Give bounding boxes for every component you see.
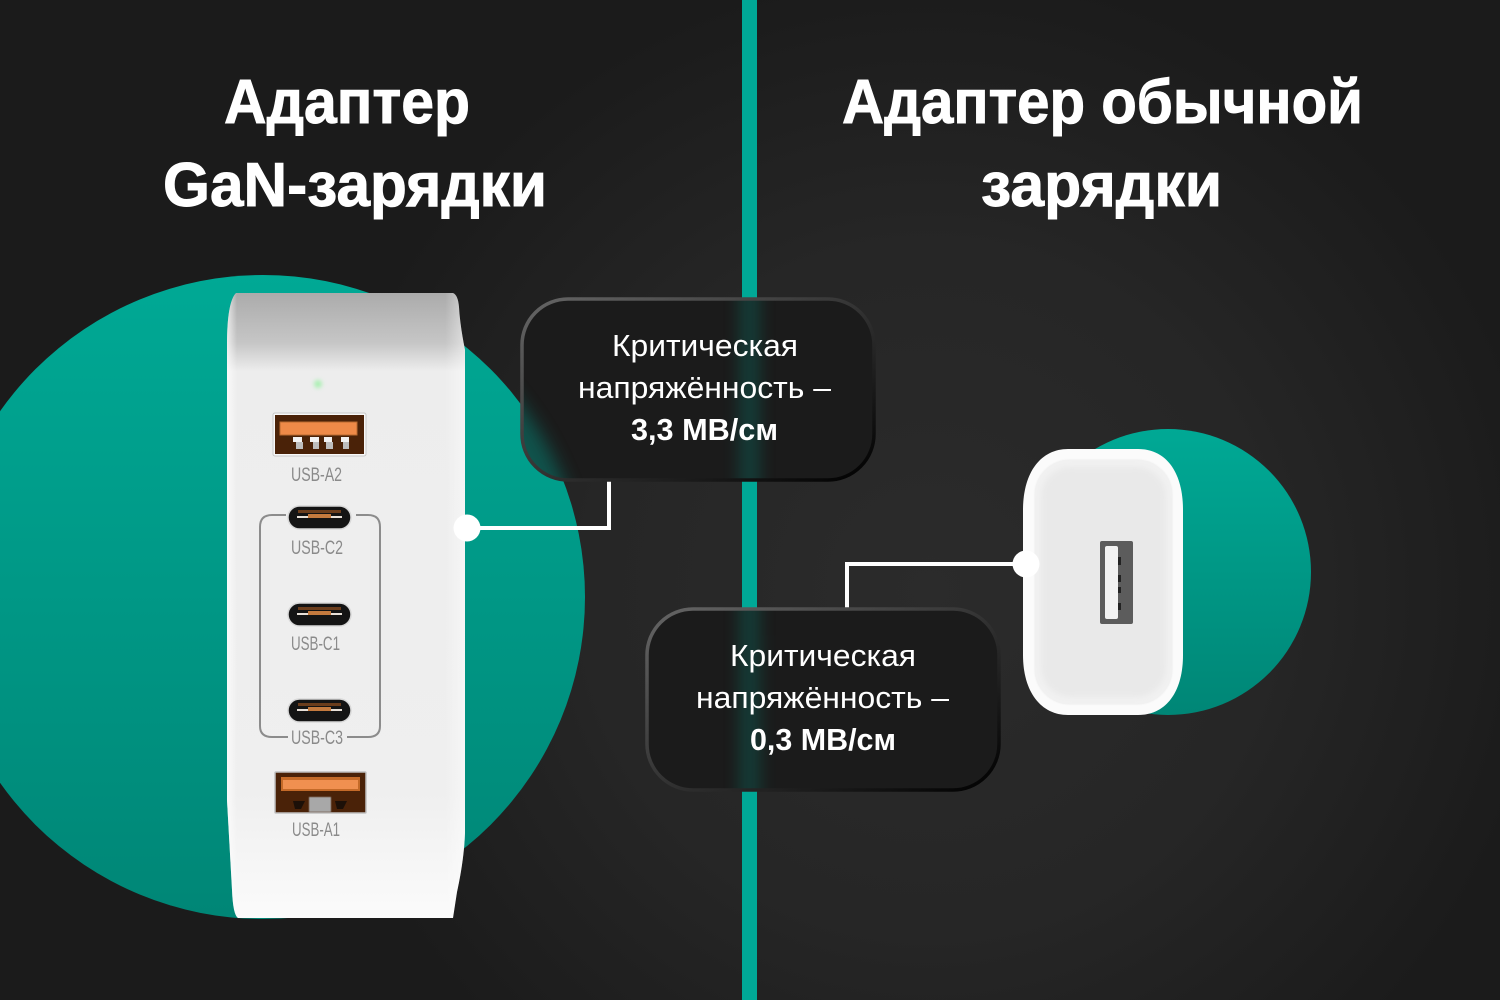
label: USB-A2: USB-A2 (291, 465, 342, 486)
port: USB-A2 (273, 413, 366, 456)
connector line: left (454, 480, 609, 542)
vertical divider (742, 0, 757, 1000)
callout: regular: 0,3 МВ/см (750, 722, 896, 757)
callout: GaN (520, 297, 876, 482)
port: USB-C3 (288, 699, 351, 722)
port group bracket (260, 515, 380, 737)
callout: GaN: 3,3 МВ/см (631, 412, 778, 447)
label: USB-A1: USB-A1 (292, 820, 340, 841)
title: left: Адаптер (224, 68, 470, 137)
charger body (220, 293, 470, 919)
teal circle: right (1025, 429, 1311, 715)
charger body (1023, 449, 1183, 715)
teal circle: left (0, 275, 585, 919)
title: right (842, 68, 1363, 220)
connector line: right (847, 550, 1040, 608)
callout: GaN: напряжённость – (578, 370, 832, 405)
callout: regular (645, 607, 1001, 792)
label: USB-C1: USB-C1 (291, 634, 340, 655)
callout: regular: Критическая (730, 638, 916, 673)
title: left (163, 68, 547, 220)
GaN charger (220, 293, 470, 919)
LED indicator (314, 380, 322, 388)
callout: regular: напряжённость – (696, 680, 950, 715)
label: USB-C2: USB-C2 (291, 538, 343, 559)
title: right: Адаптер обычной (842, 68, 1363, 137)
port: USB-A1 (275, 772, 366, 813)
USB port (1100, 541, 1133, 624)
title: left: GaN-зарядки (163, 151, 547, 220)
title: right: зарядки (981, 151, 1222, 220)
port: USB-C1 (288, 603, 351, 626)
label: USB-C3: USB-C3 (291, 728, 343, 749)
callout: GaN: Критическая (612, 328, 798, 363)
regular charger (1023, 449, 1183, 715)
port: USB-C2 (288, 506, 351, 529)
